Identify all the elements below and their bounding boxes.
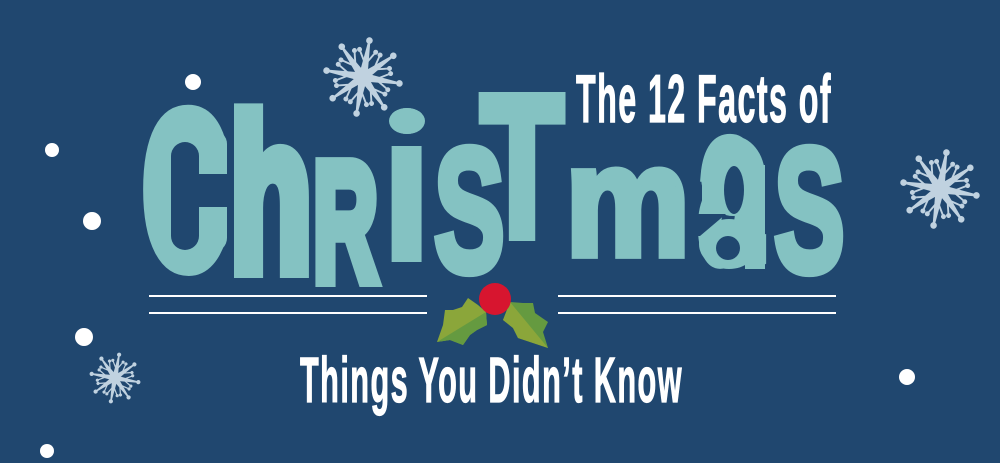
icon: snowflake bottom left — [88, 351, 142, 405]
holly berry — [479, 283, 511, 315]
right holly leaf — [503, 302, 548, 348]
title: Christmas: i — [383, 73, 430, 301]
icon: holly — [437, 283, 548, 348]
title: Christmas: a — [698, 60, 763, 308]
title: Christmas — [143, 92, 844, 287]
left holly leaf — [437, 298, 487, 345]
right divider lines — [558, 295, 836, 314]
title: Christmas: h — [230, 74, 312, 316]
title: Christmas: S — [774, 111, 845, 309]
title: Christmas: S — [434, 111, 505, 309]
title: Christmas: R — [313, 127, 378, 316]
icon: snowflake right — [898, 147, 982, 231]
left divider lines — [149, 295, 427, 314]
title: Christmas: T — [480, 54, 564, 279]
title: Christmas: C — [142, 67, 229, 316]
snow dots — [40, 74, 915, 458]
icon: snowflake top — [321, 35, 405, 119]
title: Christmas: m — [565, 113, 690, 289]
